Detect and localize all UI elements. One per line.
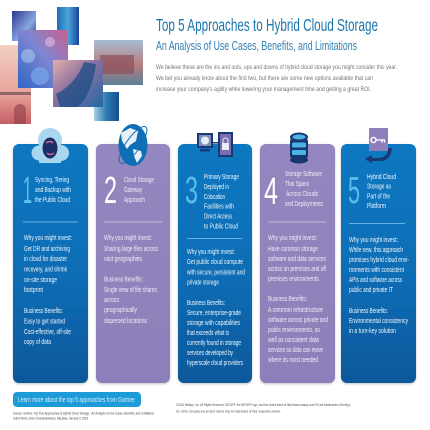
heading 5: Part of the — [367, 192, 390, 200]
body 1: on-site storage — [24, 275, 57, 284]
body 2: dispersed locations — [104, 316, 147, 325]
photo collage — [0, 7, 143, 124]
heading 3 — [204, 172, 239, 230]
source note — [13, 410, 154, 420]
body 3: hyperscale cloud providers — [187, 358, 243, 367]
body 4: A common infrastructure — [268, 305, 323, 314]
body 1: recovery, and shrink — [24, 264, 67, 274]
body 5: public and private IT — [349, 285, 393, 294]
button: learn more — [13, 392, 141, 407]
intro text: We bet you already know about the first two, but there are some new options available that can — [156, 75, 373, 82]
body 3: Secure, enterprise-grade — [187, 308, 241, 317]
button: learn more: Learn more about the top 5 approaches from Gartner — [18, 395, 135, 404]
heading 3: to Public Cloud — [204, 222, 238, 230]
heading 1: the Public Cloud — [35, 195, 70, 204]
heading 1 — [35, 175, 71, 204]
body 4: Why you might invest: — [268, 233, 317, 242]
icon: database stack — [290, 132, 308, 164]
body 1: Get DR and archiving — [24, 244, 70, 253]
heading 4: and Deployments — [285, 199, 323, 208]
body 1: footprint — [24, 285, 43, 294]
body 4: Have common storage — [268, 244, 318, 253]
body 5: Business Benefits: — [349, 306, 388, 315]
body 4: across on premises and off — [268, 264, 326, 273]
icon: monitor and lock — [197, 132, 233, 157]
heading 3: Primary Storage — [204, 172, 239, 181]
body 3: that exceeds what is — [187, 328, 229, 337]
heading 5 — [367, 172, 396, 210]
body 5: Why you might invest: — [349, 235, 398, 244]
heading 3: Deployed in — [204, 182, 229, 191]
body 2: Business Benefits: — [104, 274, 143, 284]
body 4: services so data can move — [268, 345, 323, 354]
heading 1: Syncing, Tiering — [35, 175, 69, 184]
body 3: services developed by — [187, 348, 233, 357]
body 5: ronments with consistent — [349, 265, 404, 274]
body 4: well as consistent data — [267, 335, 319, 344]
heading 4 — [285, 169, 323, 208]
copyright note: Inc. Other company and product names may be trademarks of their respective owners. — [176, 410, 281, 414]
body 3: with secure, persistent and — [186, 268, 245, 276]
heading 2 — [124, 175, 154, 204]
body 1: in cloud for disaster — [24, 254, 67, 263]
source note: Julia Palmer, Arun Chandrasekaran, Raj Bala, January 9, 2018 — [13, 416, 89, 420]
body 5: APIs and software across — [349, 275, 402, 284]
panel: approach 4 — [260, 132, 335, 383]
heading 4: That Spans — [285, 179, 309, 188]
heading 2: Gateway — [124, 185, 142, 194]
number 5: 5 — [348, 170, 360, 212]
heading 4: Across Clouds — [286, 189, 318, 198]
body 2: geographically — [104, 305, 137, 314]
body 2: Why you might invest: — [104, 233, 152, 242]
heading 5: Platform — [367, 201, 386, 210]
icon: cloud with sync arrows — [32, 128, 69, 163]
body 3: private storage — [187, 278, 219, 286]
body 2: vast geographies — [104, 254, 142, 263]
heading 2: Cloud Storage — [124, 175, 154, 184]
body 4: public environments, as — [268, 325, 320, 334]
body 3: currently found in storage — [187, 338, 241, 347]
body 4: software across private and — [268, 315, 328, 324]
body 1: copy of data — [24, 337, 51, 346]
heading 5: Storage as — [367, 182, 391, 190]
body 1: Business Benefits: — [24, 306, 63, 315]
body 3: storage with capabilities — [187, 318, 240, 327]
body 3: Why you might invest: — [187, 247, 235, 256]
number 3: 3 — [185, 170, 198, 212]
panel: approach 3 — [178, 132, 252, 383]
body 5: While new, this approach — [349, 245, 403, 254]
heading 5: Hybrid Cloud — [367, 172, 396, 181]
body 3: Get public cloud compute — [187, 257, 243, 266]
body 1: Cost-effective, off-site — [24, 327, 71, 336]
body 4: where its most needed — [267, 355, 318, 364]
panel: approach 1 — [13, 128, 88, 383]
intro text: increase your company's agility while lowering your management time and getting a great ROI. — [156, 86, 371, 93]
body 5: in a turn-key solution — [349, 326, 396, 335]
panel: approach 2 — [96, 123, 170, 383]
body 1: Easy to get started — [24, 316, 65, 326]
copyright note — [176, 403, 351, 414]
body 2: Sharing large files across — [104, 244, 158, 253]
heading 2: Approach — [124, 195, 145, 204]
heading 3: Colocation — [204, 192, 225, 201]
body 2: across — [104, 295, 119, 304]
intro text — [156, 64, 397, 93]
heading 1: and Backup with — [35, 185, 71, 194]
heading 3: Direct Access — [204, 212, 232, 220]
body 3: Business Benefits: — [187, 298, 225, 307]
body 1: Why you might invest: — [24, 233, 72, 242]
number 2: 2 — [104, 170, 117, 212]
body 1 — [24, 233, 72, 346]
heading 4: Storage Software — [285, 169, 322, 178]
body 4: software and data services — [268, 254, 326, 263]
panel: approach 5 — [341, 128, 416, 383]
body 3 — [186, 247, 245, 367]
body 2 — [104, 233, 158, 325]
body 4: Business Benefits: — [268, 294, 307, 303]
panel: approach 1: 1 — [23, 170, 32, 212]
number 4: 4 — [264, 171, 278, 213]
body 4: premises environments. — [268, 274, 320, 283]
heading 3: Facilities with — [204, 202, 234, 210]
body 4 — [267, 233, 328, 364]
body 2: Single view of file shares — [104, 285, 157, 294]
icon: key and hand — [365, 128, 392, 164]
icon: globe — [115, 123, 151, 167]
copyright note: ©2018 NetApp, Inc. All Rights Reserved. NETAPP, the NETAPP logo, and the marks listed at http://www.netapp.com/TM are trademarks of NetApp, — [176, 403, 351, 407]
source note: Source: Gartner, Top Five Approaches to Hybrid Cloud Storage - An Analysis of Use Cases, Benefits, and Limitations — [13, 410, 154, 416]
body 5 — [349, 235, 409, 335]
